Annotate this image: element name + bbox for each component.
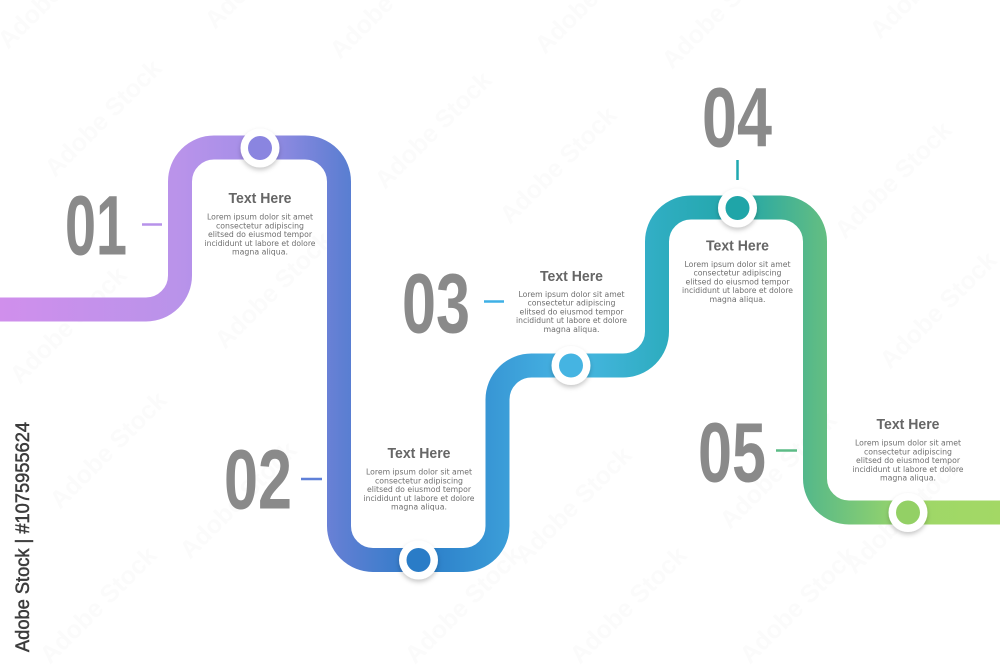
- connector 01: [142, 223, 162, 226]
- watermark: faint Adobe Stock pattern: Adobe Stock: [4, 261, 132, 389]
- text block 02: Text Here: [388, 446, 450, 462]
- text block 02: [364, 446, 474, 512]
- text block 04: consectetur adipiscing: [694, 268, 782, 278]
- text block 03: Lorem ipsum dolor sit amet: [518, 289, 625, 299]
- text block 03: [516, 269, 627, 334]
- text block 05: elitsed do eiusmod tempor: [856, 455, 961, 465]
- text block 01: Text Here: [228, 191, 292, 207]
- text block 05: Text Here: [876, 417, 940, 433]
- text block 04: incididunt ut labore et dolore: [682, 285, 793, 295]
- text block 05: [852, 417, 964, 482]
- text block 01: consectetur adipiscing: [216, 220, 304, 230]
- step 02: [224, 432, 474, 580]
- watermark: faint Adobe Stock pattern: Adobe Stock: [839, 451, 967, 579]
- text block 05: consectetur adipiscing: [864, 446, 952, 456]
- text block 01: magna aliqua.: [232, 246, 288, 256]
- watermark: faint Adobe Stock pattern: Adobe Stock: [714, 406, 842, 534]
- watermark: faint Adobe Stock pattern: Adobe Stock: [564, 541, 692, 667]
- step 04: [682, 70, 793, 304]
- text block 04: Text Here: [706, 238, 769, 254]
- text block 01: incididunt ut labore et dolore: [204, 238, 316, 248]
- text block 05: Lorem ipsum dolor sit amet: [855, 438, 962, 448]
- number 02: 02: [224, 432, 292, 526]
- step 01: [65, 128, 316, 272]
- watermark: faint Adobe Stock pattern: Adobe Stock: [509, 441, 637, 569]
- text block 05: incididunt ut labore et dolore: [852, 464, 964, 474]
- number 03: 03: [402, 256, 470, 350]
- watermark: faint Adobe Stock pattern: Adobe Stock: [874, 246, 1000, 374]
- watermark: faint Adobe Stock pattern: Adobe Stock: [494, 101, 622, 229]
- number 05: 05: [698, 406, 766, 500]
- text block 01: [204, 191, 316, 256]
- text block 02: elitsed do eiusmod tempor: [367, 484, 472, 494]
- text block 04: magna aliqua.: [710, 294, 766, 304]
- text block 02: magna aliqua.: [391, 502, 447, 512]
- watermark: faint Adobe Stock pattern: Adobe Stock: [44, 386, 172, 514]
- text block 02: consectetur adipiscing: [375, 475, 463, 485]
- text block 04: [682, 238, 793, 304]
- text block 02: Lorem ipsum dolor sit amet: [366, 467, 473, 477]
- text block 03: incididunt ut labore et dolore: [516, 315, 627, 325]
- text block 04: elitsed do eiusmod tempor: [686, 276, 790, 286]
- marker 02: [399, 540, 438, 580]
- watermark: faint Adobe Stock pattern: Adobe Stock: [39, 54, 167, 182]
- marker 01: [240, 128, 280, 168]
- text block 05: magna aliqua.: [880, 472, 936, 482]
- step 03: [402, 256, 627, 385]
- text block 03: Text Here: [540, 269, 603, 285]
- marker 03: [552, 346, 590, 385]
- connector 02: [301, 478, 322, 480]
- marker 05: [888, 493, 928, 532]
- text block 04: Lorem ipsum dolor sit amet: [684, 259, 791, 269]
- watermark: faint Adobe Stock pattern: Adobe Stock: [174, 436, 302, 564]
- winding gradient path: [0, 148, 1000, 560]
- text block 02: incididunt ut labore et dolore: [364, 493, 474, 503]
- watermark: faint Adobe Stock pattern: Adobe Stock: [829, 116, 957, 244]
- watermark: faint Adobe Stock pattern: Adobe Stock: [34, 541, 162, 667]
- watermark: faint Adobe Stock pattern: Adobe Stock: [734, 541, 862, 667]
- number 01: 01: [65, 178, 127, 272]
- stock id side label: Adobe Stock | #1075955624: [13, 422, 34, 652]
- connector 04: [736, 160, 739, 180]
- text block 03: magna aliqua.: [544, 324, 600, 334]
- connector 05: [776, 449, 797, 452]
- text block 03: consectetur adipiscing: [528, 298, 616, 308]
- text block 03: elitsed do eiusmod tempor: [520, 306, 624, 316]
- marker 04: [718, 188, 757, 228]
- step 05: [698, 406, 964, 532]
- watermark: faint Adobe Stock pattern: Adobe Stock: [399, 541, 527, 667]
- text block 01: Lorem ipsum dolor sit amet: [207, 212, 314, 222]
- watermark: faint Adobe Stock pattern: Adobe Stock: [209, 226, 337, 354]
- number 04: 04: [702, 70, 772, 164]
- text block 01: elitsed do eiusmod tempor: [208, 229, 313, 239]
- connector 03: [484, 300, 504, 303]
- watermark: faint Adobe Stock pattern: Adobe Stock: [369, 66, 497, 194]
